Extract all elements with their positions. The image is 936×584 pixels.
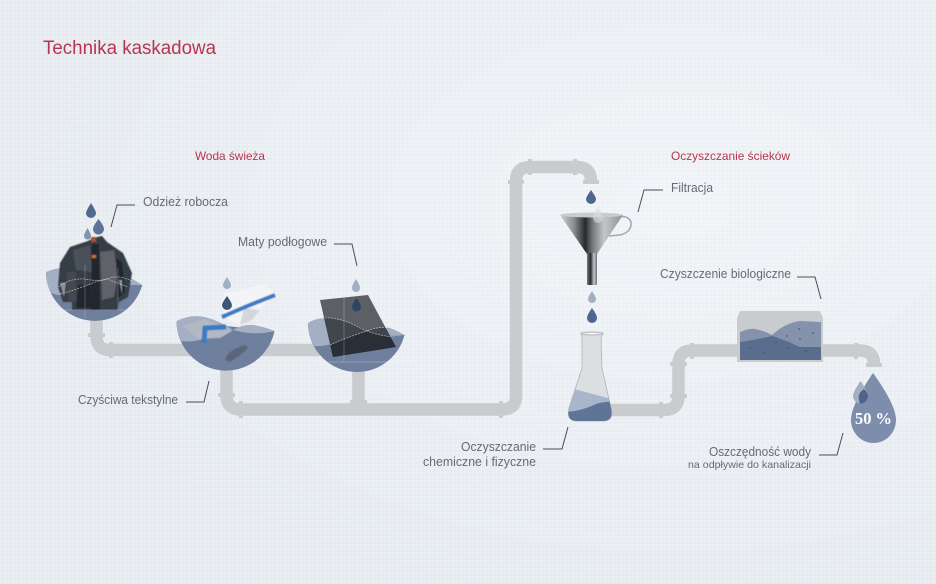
label: chemical and physical treatment: chemiczne i fizyczne [423,455,536,469]
icon: biological treatment tank [737,311,823,362]
icon: textile wipe [183,284,275,362]
label: textile wipes [78,381,209,407]
label: water saving: Oszczędność wody [709,445,812,459]
label: chemical and physical treatment [423,427,568,469]
jacket water lines [58,265,132,318]
bowl water [46,268,142,321]
icon: funnel [560,207,631,285]
drops below funnel [587,291,597,323]
icon: jacket [58,236,132,310]
icon: floor mat [320,295,396,362]
label: biological treatment: Czyszczenie biologiczne [660,267,791,281]
bowl 3: floor mats [308,279,404,372]
label: floor mats: Maty podłogowe [238,235,327,249]
bowl water [176,316,274,371]
icon: large water drop 50 percent [851,373,896,443]
title: Technika kaskadowa [43,38,216,59]
drops [352,279,361,312]
bowl water [308,318,404,372]
drops [222,277,232,310]
label: work clothes [111,195,228,227]
label: work clothes: Odzież robocza [143,195,228,209]
heading: wastewater treatment: Oczyszczanie ścieków [671,149,790,163]
drops [84,203,104,240]
label: water saving [688,433,843,471]
icon: large water drop 50 percent: 50 % [855,409,892,428]
label: textile wipes: Czyściwa tekstylne [78,393,178,407]
drop above funnel [586,190,596,204]
pipe: fresh water line from bowls to funnel [88,159,599,418]
label: filtration: Filtracja [671,181,713,195]
label: biological treatment [660,267,821,299]
label: floor mats [238,235,357,266]
bowl 2: textile wipes [176,277,275,371]
icon: flask [568,332,612,422]
pipe: flask to biological tank and outlet [606,343,882,418]
heading: fresh water: Woda świeża [195,149,265,163]
bowl 1: work clothes jacket [46,203,142,321]
label: filtration [638,181,713,212]
label: chemical and physical treatment: Oczyszczanie [461,440,536,454]
label: water saving: na odpływie do kanalizacji [688,460,811,471]
